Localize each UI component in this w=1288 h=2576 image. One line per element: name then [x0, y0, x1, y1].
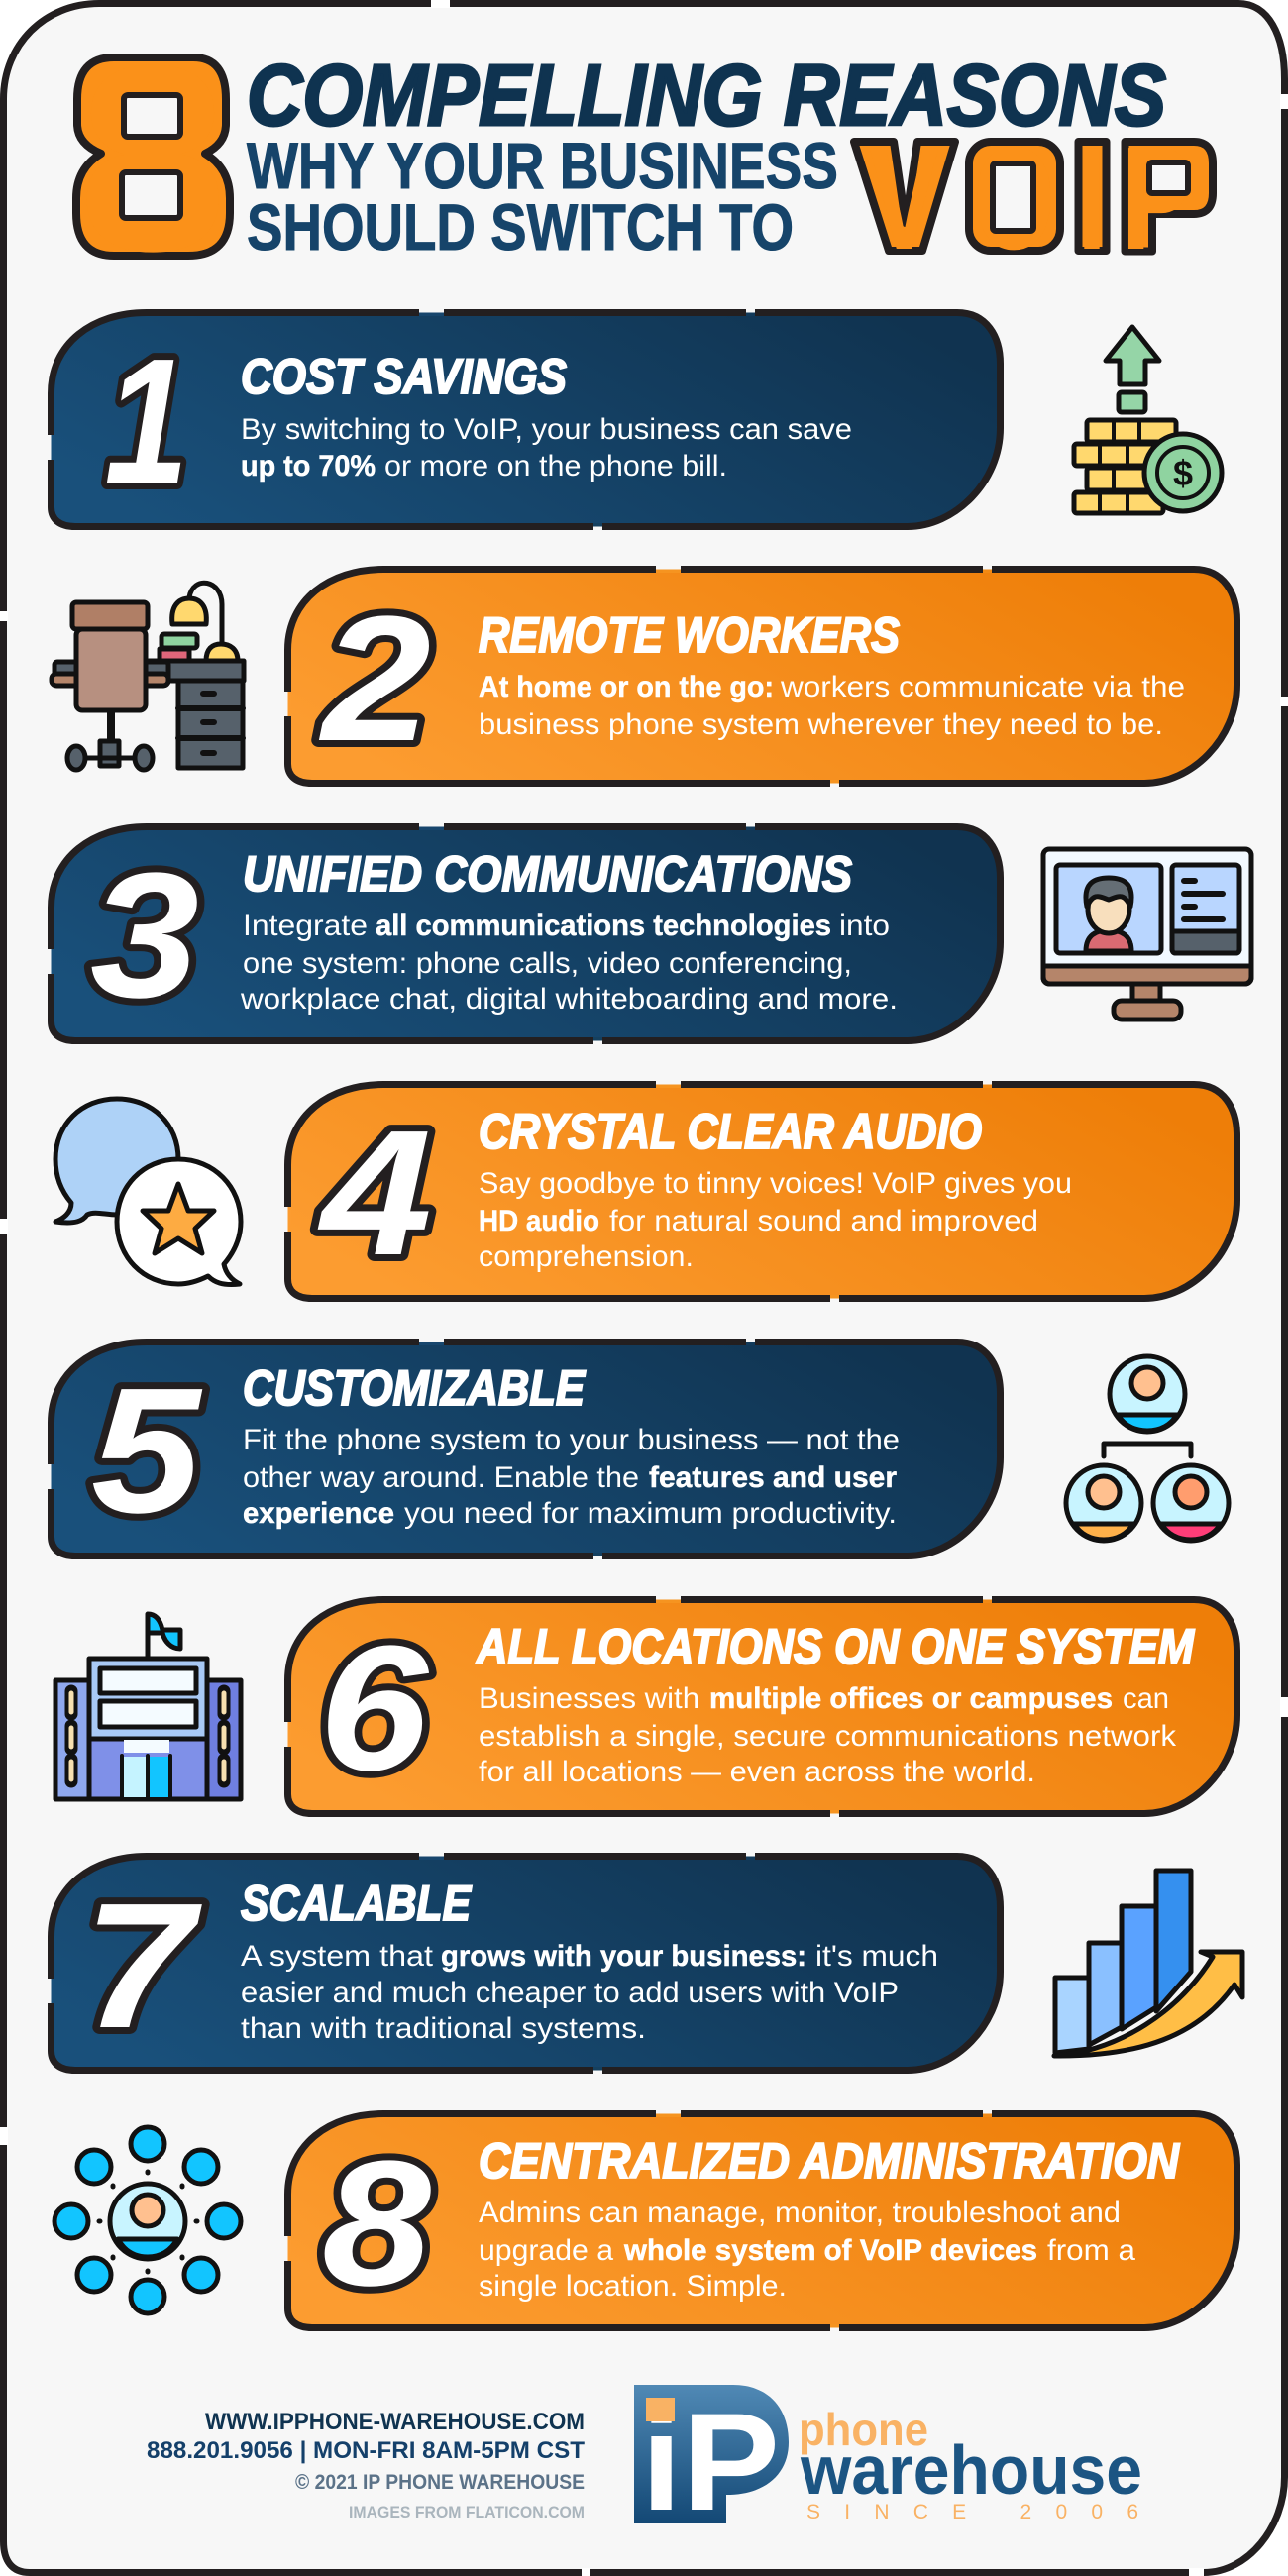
footer contact text: IMAGES FROM FLATICON.COM	[349, 2503, 585, 2522]
panel 3: unified communications	[48, 823, 1001, 1044]
logo mark: iP	[641, 2384, 780, 2539]
panel 8: centralized administration: Admins can manage, monitor, troubleshoot and	[479, 2197, 1121, 2229]
icon: coins with up arrow	[1074, 327, 1222, 513]
panel 3: unified communications: Integrate	[243, 910, 368, 942]
title line: should switch to: SHOULD SWITCH TO	[247, 190, 794, 264]
title word: VoIP: VOIP	[869, 117, 1192, 280]
icon: home office desk and chair	[52, 583, 244, 770]
panel 8: centralized administration: single location. Simple.	[479, 2270, 787, 2303]
panel 7: scalable: it's much	[815, 1940, 938, 1973]
panel 3: unified communications: 3	[90, 836, 199, 1035]
icon: central admin network	[54, 2127, 241, 2313]
panel 2: remote workers: REMOTE WORKERS	[479, 607, 900, 663]
panel 2: remote workers: workers communicate via the	[780, 671, 1185, 703]
panel 8: centralized administration: 8	[322, 2124, 431, 2323]
title line: compelling reasons: COMPELLING REASONS	[247, 48, 1166, 144]
panel 7: scalable: easier and much cheaper to add users with VoIP	[241, 1977, 899, 2009]
footer contact text: 888.201.9056 | MON-FRI 8AM-5PM CST	[147, 2437, 585, 2464]
panel 7: scalable	[48, 1853, 1001, 2074]
panel 4: crystal clear audio: for natural sound and improved	[609, 1205, 1038, 1237]
panel 1: cost savings: COST SAVINGS	[241, 349, 567, 404]
panel 1: cost savings: 1	[105, 322, 188, 521]
panel 1: cost savings: or more on the phone bill.	[384, 450, 727, 483]
panel 8: centralized administration	[284, 2110, 1236, 2331]
panel 6: all locations on one system: establish a single, secure communications network	[479, 1720, 1177, 1753]
panel 2: remote workers: At home or on the go:	[479, 671, 774, 703]
panel 1: cost savings	[48, 309, 1001, 530]
panel 6: all locations on one system: Businesses with	[479, 1682, 699, 1715]
panel 6: all locations on one system: 6	[319, 1609, 430, 1808]
panel 3: unified communications: UNIFIED COMMUNICATIONS	[243, 846, 852, 902]
panel 5: customizable: features and user	[649, 1461, 897, 1494]
panel 3: unified communications: all communications technologies	[376, 910, 831, 942]
panel 1: cost savings: up to 70%	[241, 450, 376, 483]
icon: coins with up arrow: $	[1173, 453, 1193, 493]
panel 6: all locations on one system: multiple offices or campuses	[709, 1682, 1113, 1715]
panel 3: unified communications: workplace chat, digital whiteboarding and more.	[240, 983, 898, 1016]
panel 5: customizable: you need for maximum productivity.	[404, 1497, 897, 1530]
panel 4: crystal clear audio: comprehension.	[479, 1240, 694, 1273]
title	[76, 10, 1213, 306]
panel 1: cost savings: By switching to VoIP, your business can save	[241, 413, 852, 446]
panel 5: customizable: Fit the phone system to your business — not the	[243, 1424, 900, 1456]
panel 7: scalable: grows with your business:	[441, 1940, 806, 1973]
logo word: warehouse: warehouse	[800, 2431, 1142, 2509]
icon: rising bar chart with arrow	[1054, 1871, 1242, 2056]
panel 4: crystal clear audio: CRYSTAL CLEAR AUDIO	[479, 1104, 982, 1159]
logo word: phone: phone	[799, 2404, 928, 2455]
panel 4: crystal clear audio	[284, 1081, 1236, 1302]
panel 2: remote workers: business phone system wherever they need to be.	[479, 708, 1163, 741]
panel 3: unified communications: into	[839, 910, 890, 942]
footer contact text	[147, 2409, 585, 2522]
panel 8: centralized administration: whole system of VoIP devices	[623, 2234, 1037, 2267]
panel 5: customizable: CUSTOMIZABLE	[243, 1360, 586, 1416]
panel 8: centralized administration: from a	[1047, 2234, 1135, 2267]
icon: org chart of people	[1066, 1356, 1229, 1541]
panel 7: scalable: A system that	[241, 1940, 434, 1973]
panel 6: all locations on one system: ALL LOCATIONS ON ONE SYSTEM	[475, 1619, 1195, 1674]
panel 4: crystal clear audio: 4	[318, 1094, 432, 1293]
icon: monitor with video call	[1043, 849, 1251, 1020]
panel 5: customizable: other way around. Enable the	[243, 1461, 639, 1494]
big numeral 8: 8	[78, 10, 227, 306]
icon: speech bubbles with star	[55, 1099, 241, 1285]
panel 7: scalable: than with traditional systems.	[241, 2012, 646, 2045]
footer contact text: © 2021 IP PHONE WAREHOUSE	[295, 2471, 585, 2494]
panel 6: all locations on one system: for all locations — even across the world.	[479, 1756, 1035, 1788]
icon: office building with flag	[55, 1614, 241, 1799]
footer contact text: WWW.IPPHONE-WAREHOUSE.COM	[205, 2409, 585, 2435]
panel 8: centralized administration: CENTRALIZED ADMINISTRATION	[479, 2133, 1180, 2189]
panel 2: remote workers: 2	[319, 580, 431, 779]
panel 6: all locations on one system	[284, 1596, 1236, 1817]
panel 3: unified communications: one system: phone calls, video conferencing,	[243, 947, 852, 980]
panel 4: crystal clear audio: Say goodbye to tinny voices! VoIP gives you	[479, 1167, 1072, 1200]
panel 7: scalable: SCALABLE	[241, 1876, 472, 1931]
logo: IP Phone Warehouse	[634, 2384, 1142, 2539]
panel 8: centralized administration: upgrade a	[479, 2234, 613, 2267]
panel 6: all locations on one system: can	[1123, 1682, 1169, 1715]
panel 4: crystal clear audio: HD audio	[479, 1205, 599, 1237]
panel 5: customizable: 5	[91, 1351, 203, 1551]
panel 5: customizable	[48, 1339, 1001, 1559]
panel 7: scalable: 7	[83, 1867, 203, 2066]
logo tagline: SINCE 2006	[806, 2501, 1138, 2523]
title line: why your business: WHY YOUR BUSINESS	[247, 129, 838, 202]
panel 5: customizable: experience	[243, 1497, 394, 1530]
panel 2: remote workers	[284, 566, 1236, 787]
